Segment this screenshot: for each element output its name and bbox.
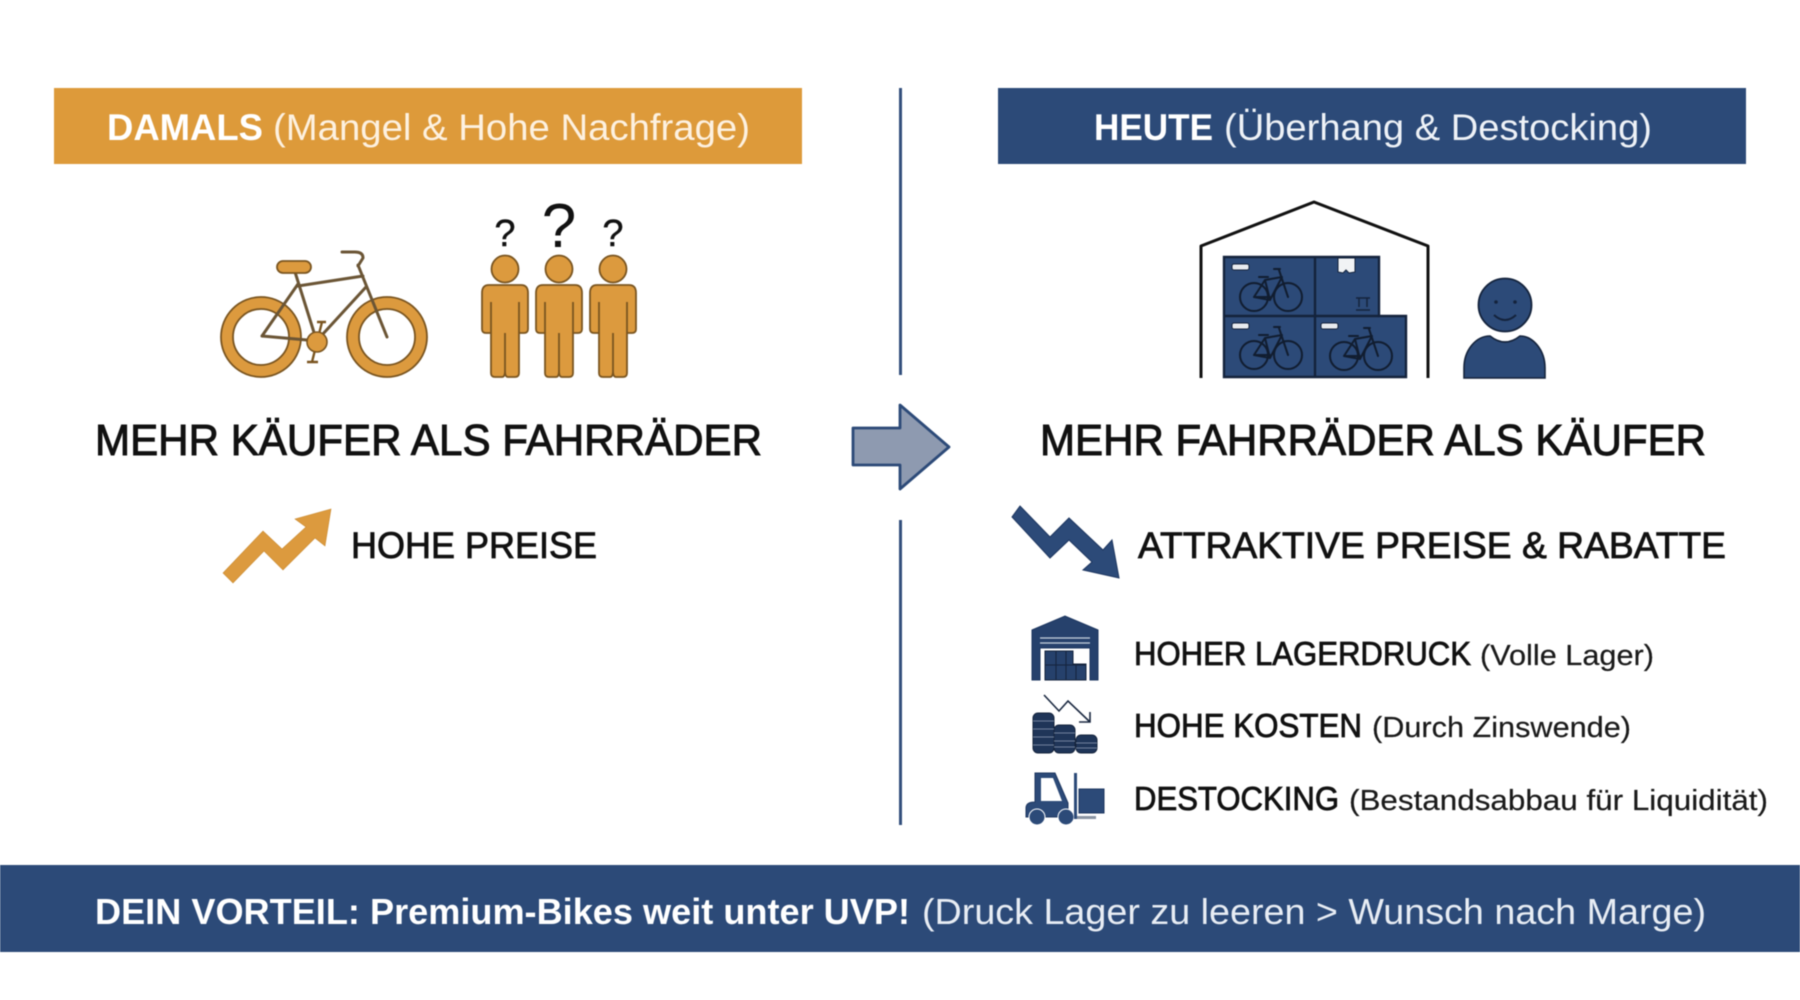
row: destocking: DESTOCKING	[1134, 780, 1339, 817]
row: high costs: HOHE KOSTEN	[1134, 707, 1362, 744]
icon: rising price arrow	[223, 509, 331, 583]
header: DAMALS: (Mangel & Hohe Nachfrage)	[273, 107, 750, 148]
row: high costs	[1134, 707, 1631, 744]
header: HEUTE	[998, 88, 1746, 164]
label: high prices: HOHE PREISE	[351, 525, 597, 566]
header: DAMALS: DAMALS	[107, 107, 263, 148]
header: DAMALS	[54, 88, 802, 164]
header: HEUTE: HEUTE	[1094, 107, 1213, 148]
row: high stock pressure: HOHER LAGERDRUCK	[1134, 635, 1471, 672]
arrow: then to now	[853, 405, 949, 489]
row: high stock pressure: (Volle Lager)	[1480, 640, 1654, 672]
icon: three buyers with question marks	[482, 192, 636, 377]
label: attractive prices: ATTRAKTIVE PREISE & RABATTE	[1138, 525, 1726, 566]
heading: more bikes than buyers: MEHR FAHRRÄDER ALS KÄUFER	[1040, 416, 1706, 465]
icon: forklift	[1026, 773, 1104, 825]
bottom banner: your advantage: (Druck Lager zu leeren > Wunsch nach Marge)	[922, 891, 1706, 932]
row: destocking: (Bestandsabbau für Liquidität)	[1349, 785, 1768, 817]
heading: more buyers than bikes: MEHR KÄUFER ALS FAHRRÄDER	[95, 416, 762, 465]
icon: bicycle	[221, 252, 427, 377]
icon: three buyers with question marks: ?	[602, 213, 624, 255]
header: HEUTE: (Überhang & Destocking)	[1224, 107, 1652, 148]
icon: smiling person	[1464, 278, 1545, 378]
icon: warehouse full of bike boxes	[1201, 202, 1428, 378]
icon: coins and falling line	[1033, 695, 1097, 753]
icon: storage hall	[1032, 616, 1098, 680]
bottom banner: your advantage: DEIN VORTEIL: Premium-Bikes weit unter UVP!	[95, 891, 910, 932]
row: high costs: (Durch Zinswende)	[1372, 712, 1631, 744]
icon: falling price arrow	[1012, 506, 1119, 578]
row: destocking	[1134, 780, 1768, 817]
icon: three buyers with question marks: ?	[494, 213, 516, 255]
bottom banner: your advantage	[0, 865, 1800, 952]
row: high stock pressure	[1134, 635, 1654, 672]
icon: three buyers with question marks: ?	[542, 192, 576, 261]
